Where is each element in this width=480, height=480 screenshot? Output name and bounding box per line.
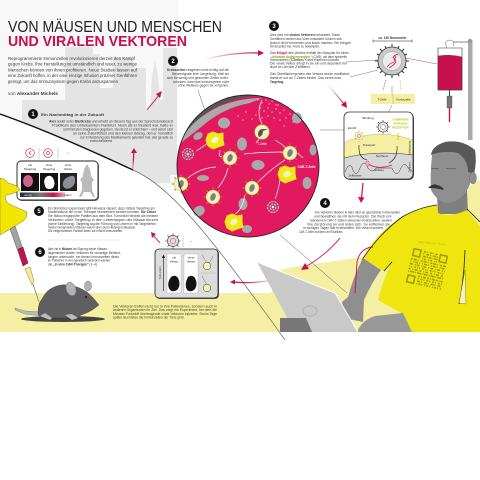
receptor marks (397, 133, 399, 140)
white area below the curve (0, 114, 285, 480)
section 1 text: Alex leidet unter Blutkrebs und erhebt an diesem Tag aus der Sprechstundenarzt (49, 120, 173, 124)
CAR T cell label: CAR-T-Zelle (297, 165, 316, 169)
laptop logo (303, 306, 317, 316)
arrow: to laptop (301, 238, 340, 270)
leader line to laptop (280, 235, 347, 293)
arrow: up from mouse imaging to section 1 (131, 148, 137, 171)
receptor arrows to cell targets (383, 80, 401, 90)
section 1 text (49, 120, 174, 143)
column labels: Targeting (43, 167, 56, 171)
curve divider line (0, 114, 285, 340)
section 3 text: CAR: Der virale Vektor dringt in sie ein und deponiert ihn (270, 62, 347, 66)
column: with vector (167, 254, 181, 293)
arrow: section 2 to 3 (203, 50, 264, 60)
grey city skyline (22, 47, 177, 183)
mouse silhouette (79, 164, 95, 197)
column: without vector (184, 254, 198, 293)
section 3 text: targeting: Targeting. (270, 80, 284, 84)
section 6 text: Alex hat in Mäusen die Eignung seiner Klassen- (48, 247, 108, 251)
connector from virus to bag (406, 58, 437, 64)
leader line to tumour cell (198, 90, 212, 132)
shirt shadow folds (362, 205, 480, 304)
column labels: ohne (65, 163, 72, 167)
icon: viral vector (375, 44, 409, 78)
panel: mouse imaging (17, 161, 99, 201)
mouse shadow (21, 316, 105, 322)
section 3 text: CAR: dort im Amim Zellkern. (270, 65, 311, 69)
section 1 text: an seine Zukunftsfest und den kleinen Betrag, den er monatlich (73, 132, 173, 136)
section 6 text: lungen untersucht, bei denen Immunzellen direkt (48, 255, 119, 259)
white blood dots (237, 95, 294, 127)
section 4 text: Die Vektoren bleiben in Alex' Blut an gezüchtete Immunzellen (315, 210, 400, 214)
step labels: Synthese (376, 154, 389, 158)
step labels: Einbau (374, 168, 384, 172)
side labels: Zellplasma (408, 140, 412, 155)
mouse feet (40, 313, 78, 320)
pale yellow hill on the right (272, 180, 480, 332)
arrow: section 3 to process panel (328, 85, 347, 108)
white migration arrows (188, 100, 303, 214)
section 3 text: targeting (270, 72, 350, 84)
section 6 (35, 247, 121, 266)
section 5 text: Modellmäuse die in der Therapie übersenden werden könnten. die Labor (48, 210, 157, 214)
scale bar (373, 36, 412, 42)
section 4 text (299, 210, 400, 234)
arrow: up to title (147, 91, 162, 110)
step labels: Eintritt (348, 126, 356, 130)
step labels: Zellkörper (348, 174, 362, 178)
CAR receptor label: CHIMÄRER (392, 118, 409, 122)
yellow band text: anderen Organismen ihr Ziel. Das zeigt ein Experiment, bei dem die (113, 308, 217, 312)
background: top zone (0, 0, 178, 190)
column labels: Vektor (64, 167, 72, 171)
mouse ears (64, 281, 92, 297)
section 3 text: CAR: „chimären Antigenrezeptor“ (CAR), mit dem spezielle (270, 55, 347, 59)
icon: infusion stand (446, 39, 472, 140)
man head (431, 147, 474, 203)
panel: tumour load (155, 249, 219, 299)
CAR receptor label (392, 118, 409, 130)
column: with vector: mit (172, 256, 176, 260)
number badge 1: 1 (31, 112, 35, 118)
column: without vector: Vektor (187, 260, 195, 264)
colour scale: wenig (24, 193, 32, 197)
arrow: process panel to section 4 (358, 183, 364, 203)
icon: yellow hand (0, 178, 27, 235)
intro text: Menschen können von ihnen profitieren. Neue Studien lassen auf (8, 68, 138, 72)
section 1 text: zur Entwicklung des Medikaments geleistet hat, das gerade zu (80, 136, 173, 140)
connector lens to panel (320, 129, 344, 131)
icon: mouse (15, 281, 105, 322)
panel: magnified blood lens (172, 94, 320, 238)
lens fill (177, 95, 319, 237)
column: without vector: ohne (188, 256, 195, 260)
section 1 text: Praktikum des Unbekannten Frankfurt. Noch als er Student war, hatte er (52, 124, 174, 128)
arrow: to tumour panel (230, 280, 273, 284)
side labels (408, 140, 412, 172)
section 5 text: Die zielgerichteten Partikel leben sie erhöht Immunzellen. (48, 229, 123, 233)
man lower arm (357, 313, 412, 332)
section 3 text: targeting: damit er nur an T-Zellen bindet. Das nennt man (270, 76, 341, 80)
section 4 (299, 198, 400, 234)
vector binding (376, 120, 390, 134)
QR code (406, 248, 448, 290)
step labels (348, 116, 389, 178)
T cell label: T-Zelle (257, 142, 267, 146)
icon: vector virus small (165, 233, 192, 249)
icon: untargeted vector (44, 149, 52, 157)
author byline: von Alexander Michels (8, 91, 59, 96)
section 3 (269, 21, 351, 84)
number badge 3: 3 (272, 24, 276, 30)
section 3 text: viral vector: Alex wird mit viralen Vektoren behandelt. Diese (270, 33, 340, 37)
section 6 text: im Patienten in vivo genetisch verändert werden: (48, 258, 111, 262)
section 5 text: Ein ähnliches Experiment gibt Hinweise darauf, dass mittels Targeting am (48, 206, 155, 210)
section 3 text: CAR (270, 51, 349, 69)
dying cells (182, 148, 279, 213)
CAR receptor label: ANTIGEN- (393, 122, 408, 126)
man moustache (428, 184, 444, 190)
laptop edge highlight (257, 262, 358, 332)
section 3 text: viral vector (269, 33, 351, 48)
section 3 text: viral vector: Immunzellen bei, Krebs zu bekämpfen. (270, 44, 320, 48)
section 5 text: Vektor behandelten Mäusen kaum über dem Hintergrundwasser. (48, 226, 136, 230)
man figure (342, 141, 480, 332)
section 5 text (48, 206, 158, 233)
lens rims (182, 96, 312, 212)
number badge 6: 6 (38, 250, 42, 256)
column labels (24, 163, 72, 171)
man hair (431, 141, 476, 174)
divider (48, 239, 120, 241)
shirt gap (459, 270, 466, 304)
yellow band text: Mäusen Forkstoff übertragende virale Vektoren injizierte. Sechs Tage (113, 312, 217, 316)
laptop (257, 262, 358, 332)
intro text: eine Zukunft hoffen, in der eine einzige Infusion präziser Genfähren (8, 73, 138, 78)
target labels: T-Zelle (377, 98, 387, 102)
yellow band text: Die Vektoren treffen nicht nur in ihre Patientenes, sondern auch in (113, 304, 217, 308)
intro text (8, 56, 138, 84)
section 2 text: sich für wenig und gesunden Zellen unter- (167, 76, 229, 80)
colour scale (20, 192, 72, 197)
column labels: ohne (46, 163, 53, 167)
column labels: Targeting (24, 167, 37, 171)
laptop base (280, 318, 312, 332)
panel border (344, 112, 413, 179)
colour scale: kaum (64, 193, 72, 197)
step labels: Bindung (362, 116, 374, 120)
section 1 heading: Ein Nachmittag in der Zukunft (41, 112, 105, 117)
man neck (437, 190, 468, 214)
step labels: Transport (363, 143, 376, 147)
man forearm and hand (342, 258, 381, 322)
column: with vector: Vektor (170, 260, 178, 264)
section 5 text: Vektoren ohne Targeting in den Leberlappen der Mäuse kürzen (48, 218, 158, 222)
man shirt (363, 205, 480, 332)
section 3 text: viral vector: jedoch nicht vermehren und krank machen. Sie bringen (269, 41, 351, 45)
section 2 (167, 56, 229, 88)
connector to process panel (385, 86, 392, 119)
tumour cells (206, 132, 296, 231)
section 5 (34, 206, 158, 233)
target labels (371, 94, 415, 104)
title: VON MÄUSEN UND MENSCHEN (8, 18, 222, 36)
section 1 text: entscheidend (90, 139, 112, 143)
column labels: mit (28, 163, 32, 167)
mouse tail (15, 308, 42, 316)
man eyes (431, 168, 456, 169)
vector entering (353, 130, 365, 142)
cell layers (344, 134, 413, 179)
target labels: Krebszelle (396, 98, 411, 102)
man ear (470, 172, 476, 184)
grey blood cells (191, 112, 316, 233)
section 2 text: Steuersignale ihrer Umgebung. Weil sie (172, 72, 229, 76)
section 3 text: CAR: Das Erbgut des Vektors enthält den Bauplan für einen (270, 51, 349, 55)
mouse scan images (21, 173, 77, 191)
section 6 text (48, 247, 121, 266)
lens border (177, 95, 319, 237)
number badge 4: 4 (323, 201, 327, 207)
section 4 text: ihre Zerstörung an und leiten sich. So entfernen sie (307, 222, 390, 226)
scale bar: ca. 150 Nanometer (378, 36, 407, 40)
yellow band text (113, 304, 217, 320)
section 1 text: schlimmsten Diagnosen gegeben. Heute ist er erleichtert – und sehnt sich (63, 128, 173, 132)
section 3 text: viral vector: Genfähren werden aus Viren entwickelt, können sich (270, 37, 342, 41)
icon: syringe (10, 226, 39, 302)
yellow band text: später leuchteten die Immunzellen der Tiere grün. (113, 316, 185, 320)
section 4 text: in wenigen Tagen alle Krebszellen. Die vielen hundert (303, 226, 383, 230)
T cell (255, 125, 269, 139)
mini cell diagrams (201, 255, 216, 292)
CAR receptor label: REZEPTOR (392, 126, 409, 130)
section 2 text: ohne Weiteres gegen sie vorgehen. (178, 84, 229, 88)
section 3 text: CAR: Immunzellen (T-Zellen) Krebs erkennen können. (270, 58, 340, 62)
process arrows (359, 145, 397, 163)
intro text: gegen Krebs. Ihre Herstellung ist umständlich und teuer, zu wenige (8, 62, 138, 66)
section 6 text: laigentierter viralen Vektoren für neuartige Behand- (48, 251, 121, 255)
section 4 text: und bewaffnen sie mit dem Rezeptor. Die frisch ent- (314, 214, 392, 218)
section 3 text: targeting: Das Oberflächenprotein des Vektors wurde modifiziert, (270, 72, 350, 76)
title: UND VIRALEN VEKTOREN (8, 33, 187, 50)
infusion tube on arm (355, 247, 373, 293)
side labels: Zellkern (408, 161, 412, 172)
section 2 text: scheiden, kann das Immunsystem nicht (173, 80, 229, 84)
section 5 text: Sie Mäusi eingeprüfte Partikel aus dem Blut. Tumorlicht blinken die meisten (48, 214, 158, 218)
targeting icons row (26, 148, 69, 159)
icon: targeted vector (26, 149, 34, 157)
number badge 1 (28, 109, 38, 119)
CAR T cells (172, 144, 300, 206)
number badge 2: 2 (171, 59, 175, 65)
mouse body (38, 285, 99, 318)
section 1 (28, 109, 174, 143)
section 6 text: die „in vivo CAR-Therapie“ (1–4) (48, 262, 97, 266)
section 2 text (167, 68, 229, 88)
section 4 text: standenen CAR-T-Zellen erkennen Krebszellen, weisen (310, 218, 392, 222)
yellow ground band (0, 293, 285, 332)
mouse eye (85, 296, 87, 298)
row dividers and dash (39, 148, 69, 159)
intro text: genügt, um das Immunsystem gegen Krebs anzuspannen (8, 79, 119, 84)
section 4 text: CAR-T-Zellen schützen vor Rückfällen. (299, 230, 343, 234)
arrow: to section 5 (151, 232, 160, 243)
intro text: Reprogrammierte Immunzellen revolutionieren derzeit den Kampf (8, 56, 136, 61)
leader lines to virus (346, 60, 378, 77)
number badge 5: 5 (37, 209, 41, 215)
section 2 text: Krebszellen reagieren nicht richtig auf die (167, 68, 229, 72)
laptop lid (257, 262, 358, 332)
title (8, 18, 222, 50)
icon: infusion bag (438, 48, 462, 138)
QR caption: Mehr Infos zum Thema (419, 240, 446, 246)
tumour axis: Tumorlast (158, 266, 162, 280)
panel: vector process (344, 112, 414, 180)
section 5 text: (siehe Einfärbung). Targeting lag die Führung von Lebern in mit Targetierten (48, 222, 156, 226)
